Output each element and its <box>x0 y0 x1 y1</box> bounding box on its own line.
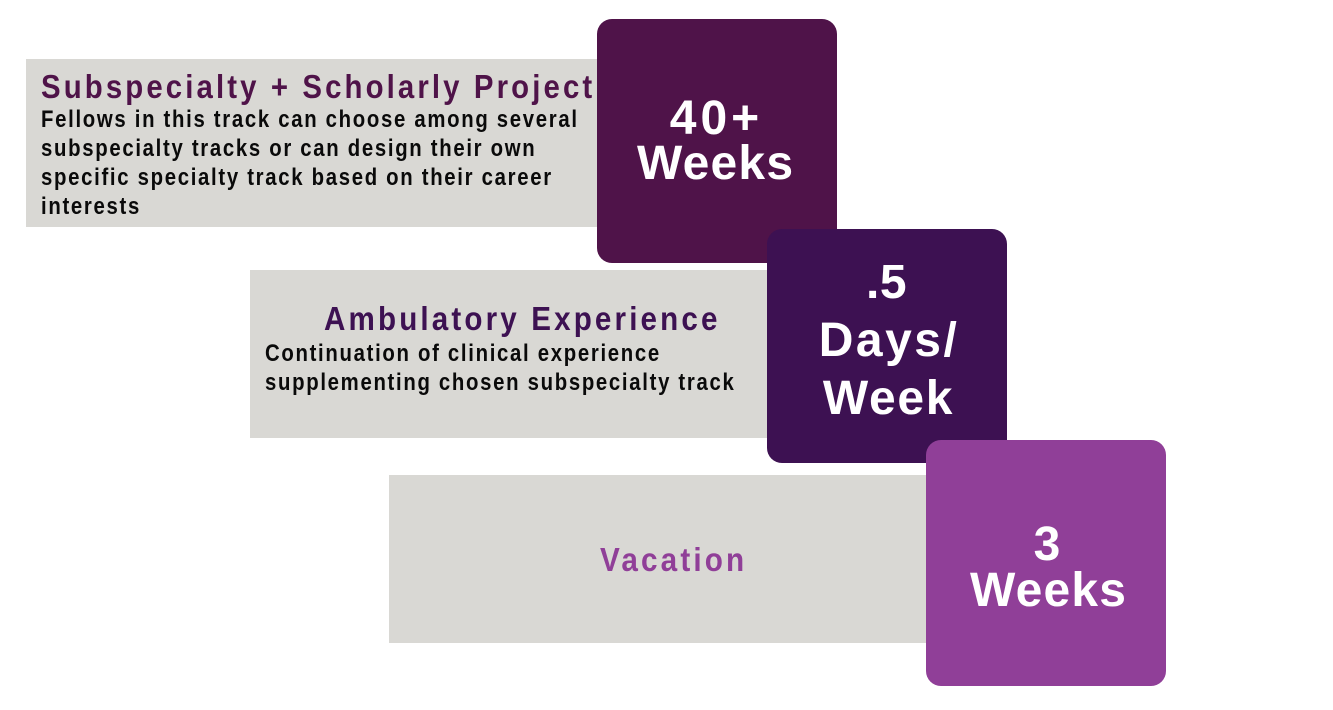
heading: ambulatory: Ambulatory Experience <box>324 300 721 337</box>
panel: ambulatory text bar <box>250 270 780 438</box>
text: subspecialty description <box>41 106 579 220</box>
text: subspecialty description: specific specialty track based on their career <box>41 164 553 191</box>
stat box: .5 days per week <box>767 229 1007 463</box>
text: subspecialty description: subspecialty tracks or can design their own <box>41 135 536 162</box>
panel: vacation text bar <box>389 475 939 643</box>
stat box: .5 days per week: .5 <box>866 256 907 309</box>
stat box: 40+ weeks: Weeks <box>637 137 794 190</box>
text: subspecialty description: interests <box>41 193 141 220</box>
stat box: .5 days per week: Days/ <box>819 314 959 367</box>
stat box: 3 weeks <box>926 440 1166 686</box>
stat box: 40+ weeks: 40+ <box>670 92 763 145</box>
heading: subspecialty: Subspecialty + Scholarly Project <box>41 68 595 105</box>
stat box: .5 days per week: Week <box>823 372 954 425</box>
panel: subspecialty text bar <box>26 59 606 227</box>
text: ambulatory description: supplementing chosen subspecialty track <box>265 369 735 396</box>
text: subspecialty description: Fellows in this track can choose among several <box>41 106 579 133</box>
text: ambulatory description <box>265 340 735 396</box>
stat box: 3 weeks: 3 <box>1034 518 1060 571</box>
text: ambulatory description: Continuation of clinical experience <box>265 340 661 367</box>
stat box: 3 weeks: Weeks <box>970 564 1127 617</box>
stat box: 40+ weeks <box>597 19 837 263</box>
heading: vacation: Vacation <box>600 541 747 578</box>
